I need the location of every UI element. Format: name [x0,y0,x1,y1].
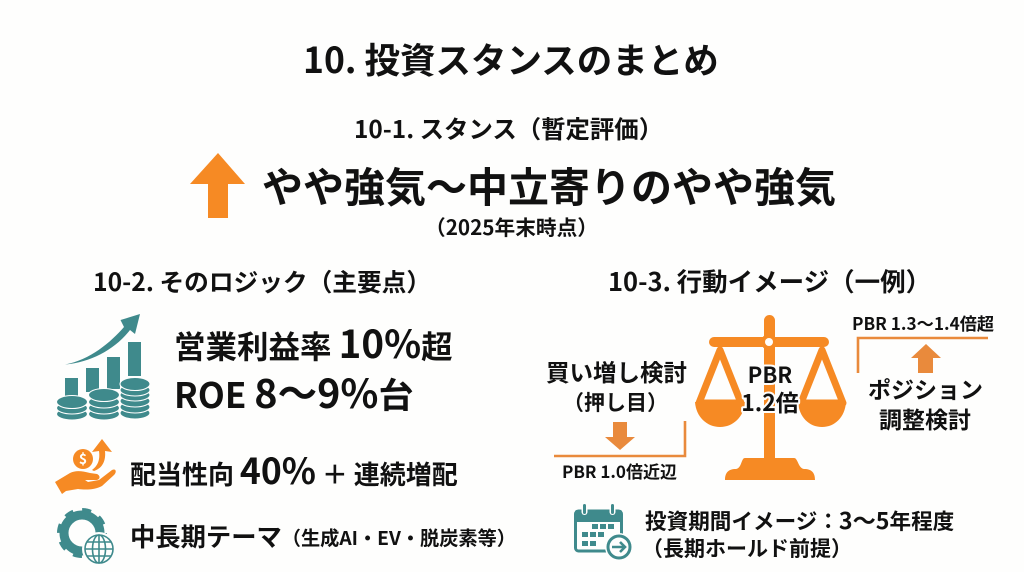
callout: buy more: （押し目） [563,387,668,417]
action heading: 10-3. 行動イメージ（一例） [608,262,931,299]
title: 10. 投資スタンスのまとめ [303,33,719,84]
icon: up arrow [190,153,245,218]
theme label: 中長期テーマ [130,518,282,554]
icon: hand with coin and arrow [55,439,116,494]
icon: calendar [575,503,633,561]
panel: action [546,262,994,563]
metric: operating margin: 営業利益率 10%超 [174,314,453,370]
investment period: 投資期間イメージ：3〜5年程度 [645,502,954,536]
panel: stance [190,111,836,241]
logic heading: 10-2. そのロジック（主要点） [93,263,431,299]
icon: hand with coin and arrow: $ [79,449,87,469]
callout: buy more: PBR 1.0倍近辺 [562,458,677,483]
theme label: （生成AI・EV・脱炭素等） [282,523,516,551]
icon: down arrow [605,422,635,450]
callout: position adjustment: 調整検討 [879,401,971,435]
callout: position adjustment: PBR 1.3〜1.4倍超 [852,310,994,335]
icon: growth chart with coins [56,314,150,420]
icon: gear with globe [59,510,116,566]
scale label: 1.2倍 [741,384,799,418]
icon: up arrow small [911,344,941,373]
investment period: （長期ホールド前提） [642,533,852,563]
callout: buy more [546,354,687,483]
metric: ROE: ROE 8〜9%台 [174,363,413,420]
icon: balance scale [695,315,846,480]
callout: buy more: 買い増し検討 [546,354,687,388]
investment period [642,502,954,563]
stance heading: 10-1. スタンス（暫定評価） [354,111,663,146]
scale label [741,358,799,418]
metric: payout: 配当性向 40% ＋ 連続増配 [130,444,458,495]
scale label: PBR [748,358,792,390]
callout: position adjustment: ポジション [868,371,983,405]
callout: position adjustment [852,310,994,435]
panel: logic [55,263,516,566]
stance statement: やや強気〜中立寄りのやや強気 [262,154,836,214]
stance date: （2025年末時点） [425,211,598,241]
